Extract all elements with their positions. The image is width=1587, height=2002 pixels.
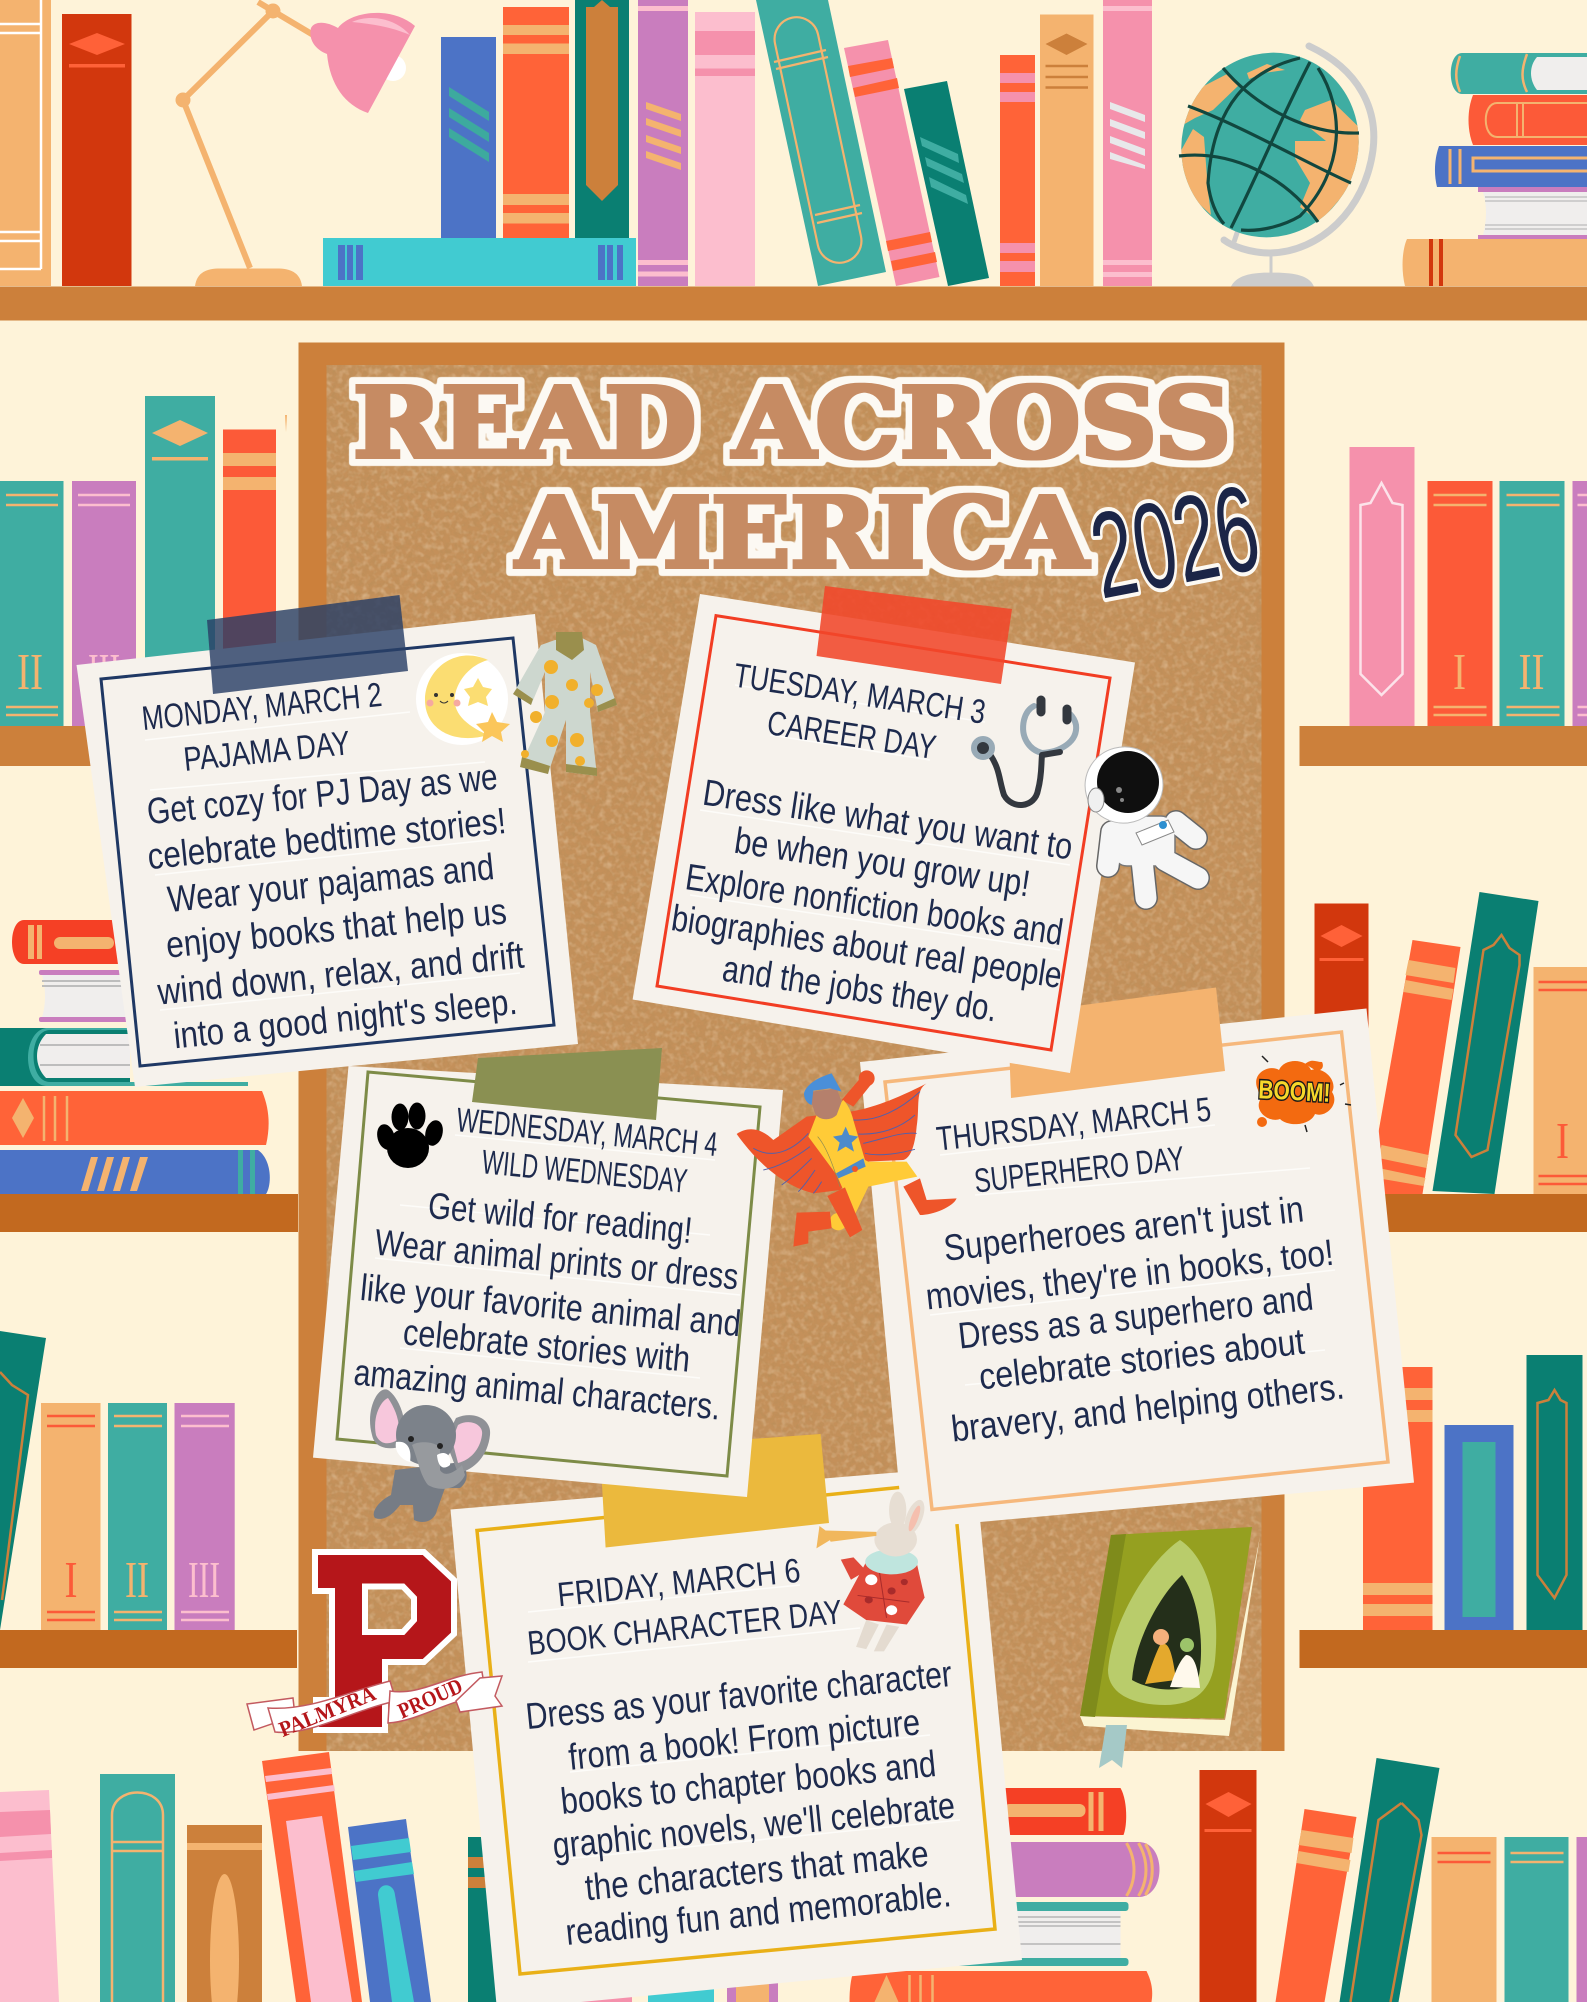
book: tilted orange with pink panel xyxy=(262,1752,362,2002)
left middle shelf with book stack xyxy=(0,920,298,1232)
heading: Tuesday: CAREER DAY xyxy=(765,704,939,767)
text: Friday body: reading fun and memorable. xyxy=(564,1873,953,1953)
shelf plank xyxy=(0,1630,297,1668)
book: red spine xyxy=(62,14,132,286)
book: teal xyxy=(1504,1837,1568,2002)
text: Wednesday body xyxy=(352,1185,743,1428)
heading: Wednesday: WILD WEDNESDAY xyxy=(480,1143,689,1201)
book: bronze with oval xyxy=(187,1825,262,2002)
shelf plank xyxy=(1284,1194,1587,1232)
right upper shelf with books xyxy=(1300,447,1587,766)
text: Monday body: into a good night's sleep. xyxy=(172,981,519,1056)
heading: Friday xyxy=(526,1552,844,1663)
book: teal II xyxy=(1500,481,1564,726)
book: peach with diamond xyxy=(1040,14,1094,286)
book: teal II xyxy=(108,1403,167,1630)
panel: Thursday card xyxy=(860,988,1414,1529)
book: purple xyxy=(1572,481,1587,726)
book: peach I: I xyxy=(64,1552,78,1609)
icon: paw print xyxy=(374,1102,446,1168)
text: Friday body xyxy=(524,1653,957,1953)
book: pink tall xyxy=(1103,0,1152,286)
text: Monday body xyxy=(145,756,526,1056)
icon: superhero xyxy=(737,1070,957,1247)
heading: Monday: PAJAMA DAY xyxy=(182,724,352,779)
text: Monday body: enjoy books that help us xyxy=(164,890,508,966)
banner: PROUD xyxy=(388,1672,502,1723)
heading: Tuesday xyxy=(731,657,988,767)
right middle shelf with books xyxy=(1284,892,1587,1232)
title year 2026: 2026 xyxy=(1081,459,1269,624)
book: blue xyxy=(1444,1425,1514,1630)
book: red stripes xyxy=(223,430,276,726)
heading: Monday xyxy=(140,676,384,779)
tape: Monday xyxy=(207,595,408,694)
book: peach xyxy=(1432,1837,1496,2002)
book: purple III: III xyxy=(188,1552,220,1609)
book: pages xyxy=(39,970,140,1022)
book: purple III xyxy=(174,1403,235,1630)
book: tilted pink xyxy=(844,40,940,286)
shelf plank xyxy=(0,726,298,766)
book: tilted dark teal xyxy=(904,81,989,286)
icon: globe xyxy=(1178,42,1378,286)
book: red I xyxy=(1428,481,1492,726)
book: dark teal partial xyxy=(468,1837,508,2002)
book: peach I xyxy=(41,1403,100,1630)
text: Friday body: the characters that make xyxy=(583,1833,930,1908)
book: tilted orange xyxy=(1276,1809,1356,2002)
shelf plank xyxy=(0,286,1587,320)
title: AMERICA xyxy=(515,476,1090,590)
icon: pajamas xyxy=(513,632,617,776)
text: Friday body: Dress as your favorite character xyxy=(524,1653,954,1737)
book: orange narrow xyxy=(1000,55,1035,286)
panel: Tuesday card xyxy=(633,586,1135,1073)
book: teal II: II xyxy=(1518,644,1544,701)
tape: Wednesday xyxy=(472,1048,662,1120)
shelf plank xyxy=(1300,726,1587,766)
left lower shelf with books xyxy=(0,1331,297,1668)
icon: stethoscope xyxy=(974,700,1076,805)
text: Monday body: Get cozy for PJ Day as we xyxy=(145,756,499,832)
tape: Friday xyxy=(600,1434,829,1548)
icon: desk lamp xyxy=(176,2,415,286)
book: light pink xyxy=(695,12,755,286)
book: dark teal xyxy=(575,0,629,239)
book: red I: I xyxy=(1453,644,1466,701)
book: dark teal with pages xyxy=(0,1028,248,1086)
book: orange lying xyxy=(0,1091,269,1145)
book: tilted dark teal xyxy=(1432,892,1538,1194)
book: purple xyxy=(1576,1837,1587,2002)
bottom row books right xyxy=(850,1758,1587,2002)
book stack right xyxy=(1403,53,1587,286)
panel: Friday card xyxy=(450,1434,1022,2002)
icon: boom burst xyxy=(1256,1056,1351,1132)
icon: moon and stars xyxy=(416,653,510,745)
text: Friday body: from a book! From picture xyxy=(567,1701,922,1778)
panel: Wednesday card xyxy=(313,1048,783,1497)
book: purple III xyxy=(72,481,136,726)
book: teal I: II xyxy=(17,644,43,701)
icon: elephant xyxy=(370,1389,490,1522)
heading: Friday: BOOK CHARACTER DAY xyxy=(526,1593,844,1663)
title xyxy=(353,366,1231,590)
icon: fairy tale book xyxy=(1080,1527,1260,1768)
book: peach I: I xyxy=(1556,1113,1569,1170)
book: orange xyxy=(1363,1367,1432,1630)
panel: Monday card xyxy=(76,595,617,1087)
text: Friday body: graphic novels, we'll celebrate xyxy=(551,1785,957,1866)
text: Friday body: books to chapter books and xyxy=(559,1743,938,1822)
book: tilted blue xyxy=(348,1819,431,2002)
text: Tuesday body xyxy=(669,772,1075,1029)
book: orange with stripes xyxy=(503,7,569,239)
text: Tuesday body: Dress like what you want to xyxy=(700,772,1075,867)
book: teal II: II xyxy=(125,1552,149,1609)
text: Tuesday body: be when you grow up! xyxy=(732,820,1033,904)
text: Thursday body: bravery, and helping others. xyxy=(949,1366,1346,1450)
heading: Thursday xyxy=(935,1091,1213,1201)
book: tilted teal xyxy=(756,0,886,286)
text: Thursday body xyxy=(924,1188,1346,1450)
text: Wednesday body: Wear animal prints or dress xyxy=(373,1222,740,1297)
book: peach I xyxy=(1534,967,1587,1194)
book: purple III: III xyxy=(88,644,120,701)
book: teal with arch xyxy=(100,1774,175,2002)
heading: Wednesday xyxy=(455,1101,719,1201)
book: tall teal xyxy=(145,396,215,726)
icon: Palmyra P logo xyxy=(247,1552,502,1742)
book: dark red xyxy=(1200,1770,1256,2002)
book: tilted light pink xyxy=(0,1790,59,2002)
heading: Thursday: SUPERHERO DAY xyxy=(972,1140,1186,1201)
text: Thursday body: Superheroes aren't just in xyxy=(941,1188,1306,1269)
banner: PALMYRA: PALMYRA xyxy=(275,1680,379,1742)
text: Thursday body: celebrate stories about xyxy=(977,1321,1307,1397)
book: lying cyan xyxy=(323,238,636,286)
text: Thursday body: movies, they're in books, too! xyxy=(924,1232,1336,1317)
book: teal I xyxy=(0,481,64,726)
icon: astronaut xyxy=(1076,738,1198,898)
top shelf with books, lamp and globe xyxy=(0,0,1587,320)
icon: rabbit herald xyxy=(816,1492,928,1651)
banner: PROUD: PROUD xyxy=(394,1673,466,1723)
text: Wednesday body: like your favorite animal and xyxy=(359,1267,743,1344)
book: pink with bookmark outline xyxy=(1350,447,1414,726)
text: Tuesday body: Explore nonfiction books and xyxy=(683,856,1066,953)
left upper shelf with books xyxy=(0,396,298,766)
heading: Friday: FRIDAY, MARCH 6 xyxy=(556,1552,802,1614)
book stack xyxy=(850,1788,1160,2002)
text: Monday body: celebrate bedtime stories! xyxy=(146,800,508,877)
tape: Thursday xyxy=(1008,988,1225,1098)
heading: Monday: MONDAY, MARCH 2 xyxy=(140,676,384,738)
book: tilted orange xyxy=(1368,940,1460,1194)
small book spines below card xyxy=(510,1973,778,2002)
book: peach spine left xyxy=(0,0,51,286)
shelf plank xyxy=(1300,1630,1587,1668)
text: Tuesday body: biographies about real people xyxy=(669,897,1065,996)
book: dark red xyxy=(1314,904,1368,1194)
bulletin board frame xyxy=(298,342,1284,1751)
text: Wednesday body: amazing animal characters. xyxy=(352,1352,722,1428)
icon: boom burst: BOOM! xyxy=(1258,1074,1331,1108)
book: blue lying xyxy=(0,1150,270,1194)
text: Wednesday body: celebrate stories with xyxy=(401,1311,692,1380)
text: Wednesday body: Get wild for reading! xyxy=(426,1185,694,1251)
book: tilted dark teal xyxy=(0,1331,46,1630)
text: Monday body: Wear your pajamas and xyxy=(166,846,496,920)
tape: Tuesday xyxy=(816,586,1012,684)
text: Monday body: wind down, relax, and drift xyxy=(155,935,526,1013)
book: purple xyxy=(638,0,688,286)
bottom row books left xyxy=(0,1752,778,2002)
book: blue with slashes xyxy=(441,37,496,239)
heading: Tuesday: TUESDAY, MARCH 3 xyxy=(731,657,988,732)
book: tilted dark teal xyxy=(1340,1758,1440,2002)
book: red top of stack xyxy=(12,920,200,964)
heading: Thursday: THURSDAY, MARCH 5 xyxy=(935,1091,1213,1159)
right lower shelf with books xyxy=(1300,1355,1587,1668)
shelf plank xyxy=(0,1194,298,1232)
title: READ ACROSS xyxy=(353,366,1231,480)
text: Thursday body: Dress as a superhero and xyxy=(956,1277,1315,1357)
text: Tuesday body: and the jobs they do. xyxy=(720,948,1000,1029)
heading: Wednesday: WEDNESDAY, MARCH 4 xyxy=(455,1101,719,1164)
cork board xyxy=(326,365,1262,1751)
book: dark teal xyxy=(1526,1355,1582,1630)
